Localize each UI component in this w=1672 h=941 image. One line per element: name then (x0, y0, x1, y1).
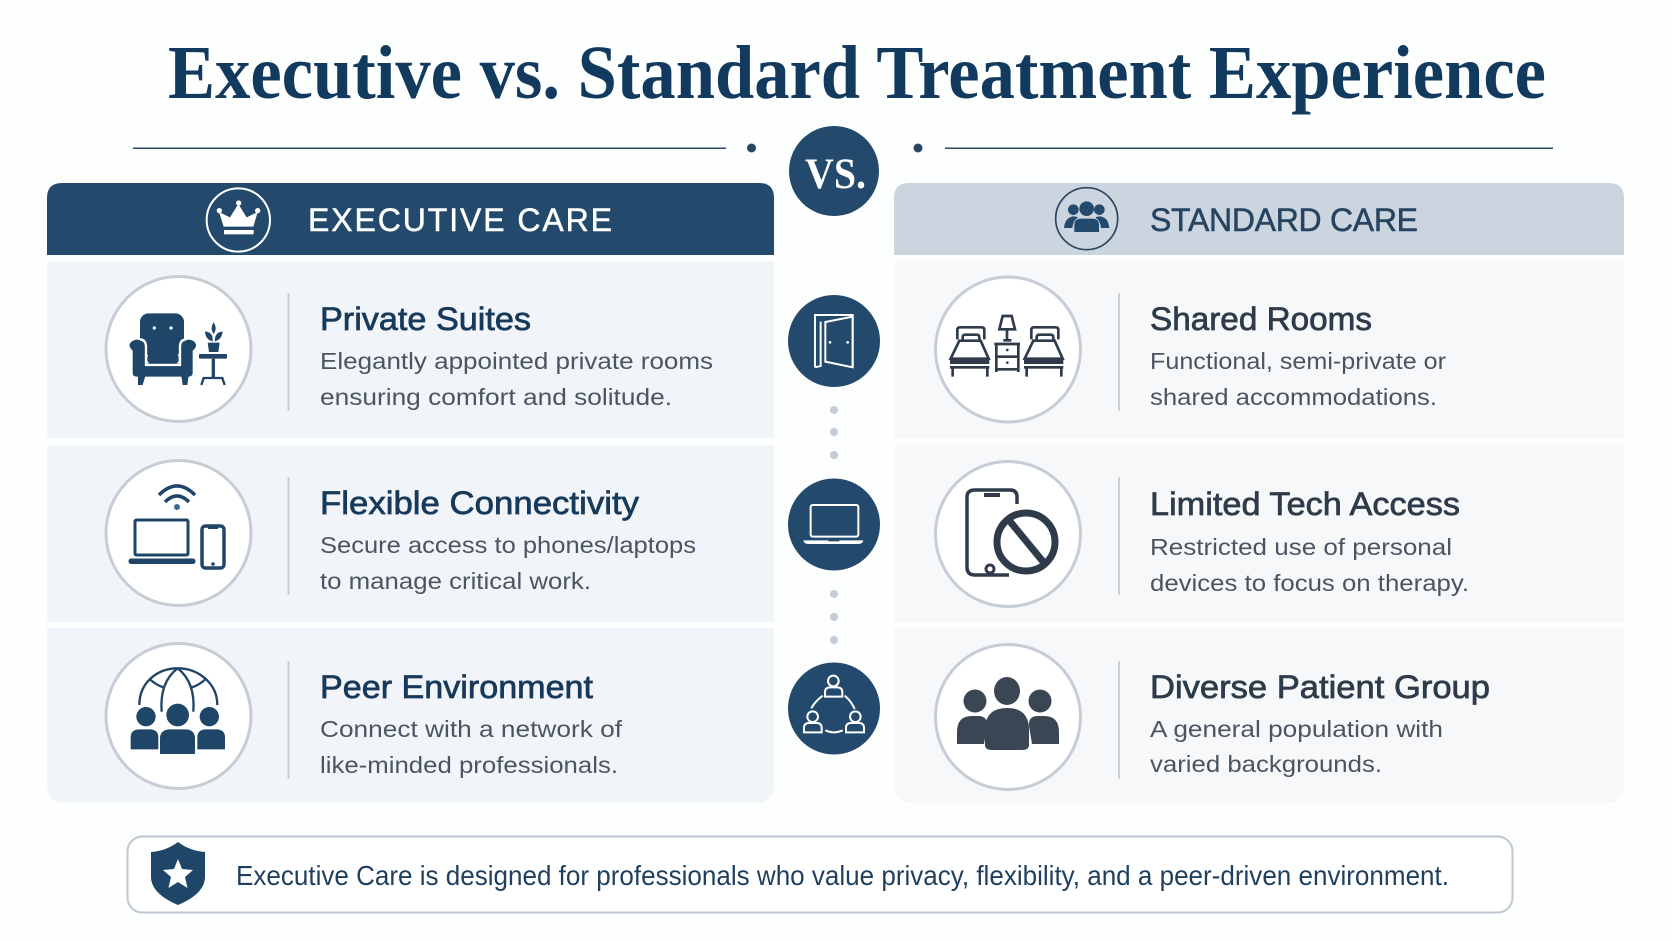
text: limited tech access: Limited Tech Access (1150, 486, 1460, 522)
text: flexible connectivity: Flexible Connectivity (320, 485, 639, 521)
text: limited tech access: Restricted use of personal (1150, 534, 1452, 560)
text: limited tech access: devices to focus on therapy. (1150, 570, 1469, 596)
text: diverse patient group: A general population with (1150, 716, 1443, 742)
executive care header (47, 183, 774, 255)
text: private suites: Private Suites (320, 301, 531, 337)
text: flexible connectivity (320, 485, 696, 594)
text: peer environment: Connect with a network of (320, 716, 623, 742)
row: shared rooms (894, 261, 1624, 438)
icon: crown (207, 188, 270, 252)
executive care label: EXECUTIVE CARE (308, 202, 612, 238)
row: limited tech access (894, 445, 1624, 622)
connector dots lower (830, 590, 838, 644)
text: private suites: Elegantly appointed private rooms (320, 348, 713, 374)
row: diverse patient group (894, 628, 1624, 803)
icon: laptop badge (788, 478, 880, 570)
connector dots upper (830, 406, 838, 459)
icon: three people (957, 677, 1059, 750)
text: flexible connectivity: Secure access to phones/laptops (320, 532, 696, 558)
text: shared rooms: Shared Rooms (1150, 301, 1372, 337)
text: private suites: ensuring comfort and solitude. (320, 384, 672, 410)
icon: globe and peers (131, 668, 225, 754)
text: diverse patient group (1150, 669, 1490, 777)
header rule with dots (133, 144, 1553, 152)
callout text: Executive Care is designed for professionals who value privacy, flexibility, and a peer-driven environment. (236, 860, 1449, 891)
text: peer environment (320, 669, 623, 778)
icon: laptop, phone and wifi (128, 486, 224, 568)
icon: twin beds and nightstand (950, 316, 1063, 377)
row: peer environment (47, 628, 774, 803)
text: private suites (320, 301, 713, 410)
icon: armchair and side table (129, 313, 227, 385)
icon: group in ring (1056, 188, 1118, 250)
icon: shield with star (151, 842, 205, 905)
text: diverse patient group: Diverse Patient Group (1150, 669, 1490, 705)
text: flexible connectivity: to manage critical work. (320, 568, 591, 594)
icon: door badge (788, 295, 880, 387)
text: shared rooms: Functional, semi-private or (1150, 348, 1446, 374)
text: diverse patient group: varied backgrounds. (1150, 751, 1382, 777)
text: shared rooms: shared accommodations. (1150, 384, 1437, 410)
panel: executive care (47, 183, 774, 803)
title: Executive vs. Standard Treatment Experience (168, 31, 1546, 115)
vs badge (789, 126, 879, 216)
callout (128, 836, 1512, 912)
text: shared rooms (1150, 301, 1446, 410)
row: flexible connectivity (47, 445, 774, 622)
vs badge: VS. (805, 151, 866, 198)
standard care label: STANDARD CARE (1150, 202, 1418, 238)
row: private suites (47, 261, 774, 438)
text: peer environment: like-minded professionals. (320, 752, 618, 778)
icon: phone with prohibition sign (967, 490, 1055, 575)
panel: standard care (894, 183, 1624, 803)
text: limited tech access (1150, 486, 1469, 596)
text: peer environment: Peer Environment (320, 669, 593, 705)
standard care header (894, 183, 1624, 255)
icon: network badge (788, 662, 880, 754)
